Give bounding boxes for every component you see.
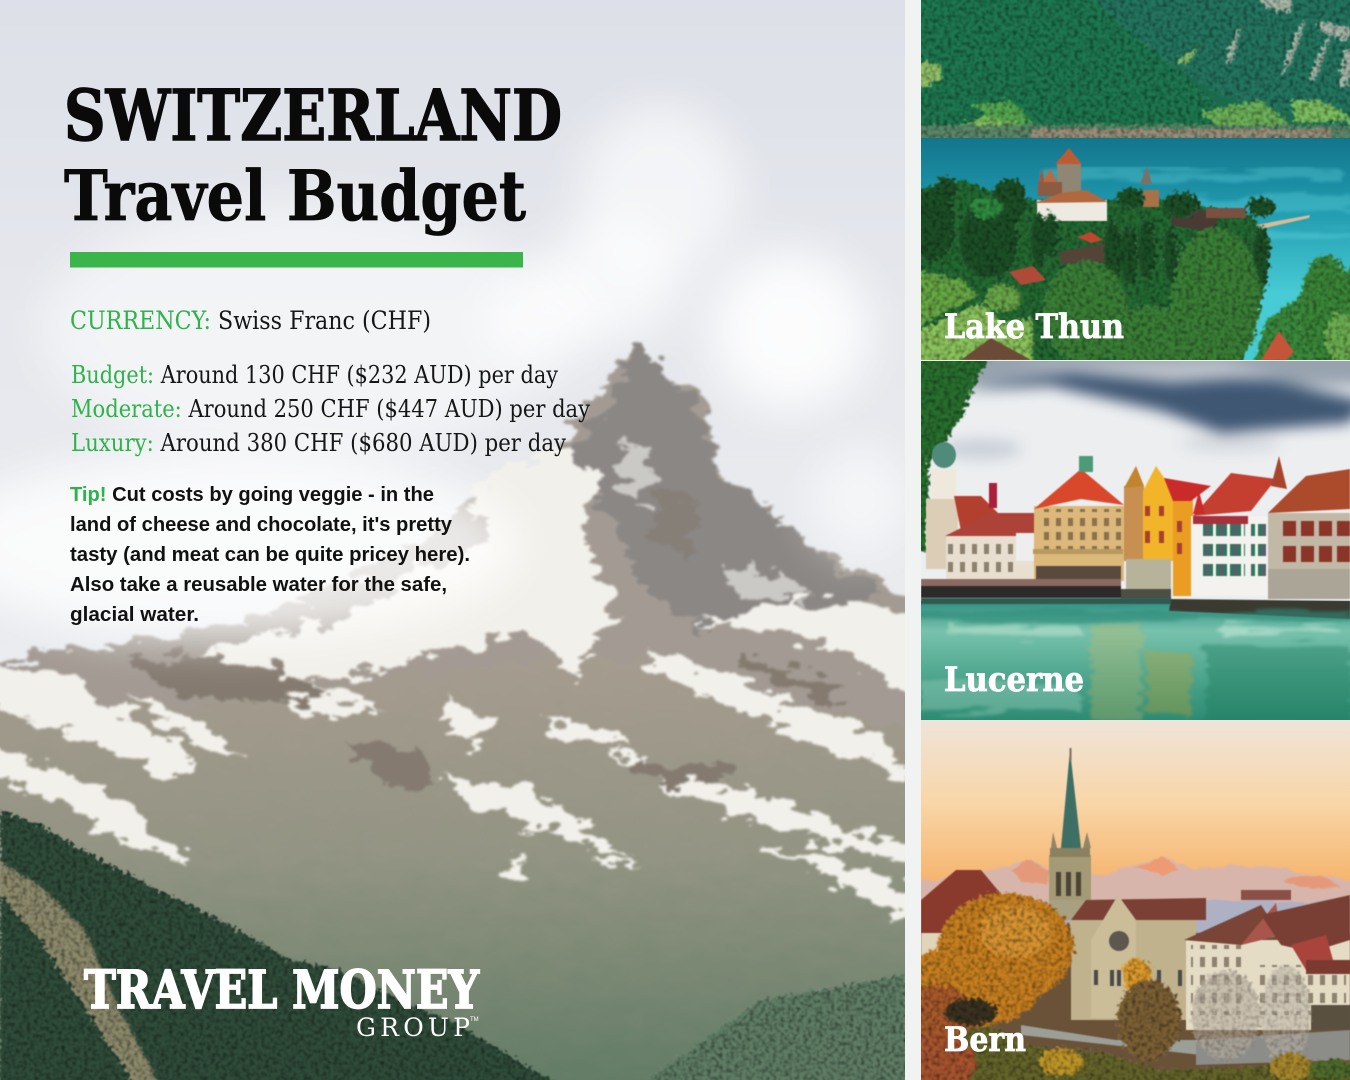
tip text: Tip! Cut costs by going veggie - in the [70,484,434,506]
label: Lucerne: Lucerne [944,660,1084,700]
clouds over the slopes [0,454,896,670]
currency line: CURRENCY: Swiss Franc (CHF) [70,306,431,335]
logo: Travel Money Group [84,960,480,1042]
logo: Travel Money Group: TM [470,1017,479,1023]
logo: Travel Money Group: GROUP [356,1013,470,1042]
forest [0,810,905,1080]
budget levels: Budget: Around 130 CHF ($232 AUD) per day [71,361,558,389]
logo: Travel Money Group: TRAVEL MONEY [84,960,480,1021]
tip text [70,484,470,626]
label: Lake Thun: Lake Thun [944,307,1124,347]
budget levels: Luxury: Around 380 CHF ($680 AUD) per day [71,429,566,457]
tip text: land of cheese and chocolate, it's pretty [70,514,453,536]
label: Bern: Bern [944,1020,1026,1060]
panel: Bern photo [894,720,1350,1080]
tip text: tasty (and meat can be quite pricey here). [70,544,470,566]
title underline [70,252,523,268]
title [64,74,562,237]
title: Travel Budget [64,156,526,237]
tip text: glacial water. [70,604,199,626]
panel: mountain photo background [0,0,925,1080]
title: SWITZERLAND [64,74,562,157]
mountain base [0,345,925,1080]
budget levels: Moderate: Around 250 CHF ($447 AUD) per day [71,395,590,423]
panel: Lake Thun photo [911,0,1350,378]
panel: Lucerne photo [921,361,1350,720]
tip text: Also take a reusable water for the safe, [70,574,447,596]
budget levels [71,361,590,457]
